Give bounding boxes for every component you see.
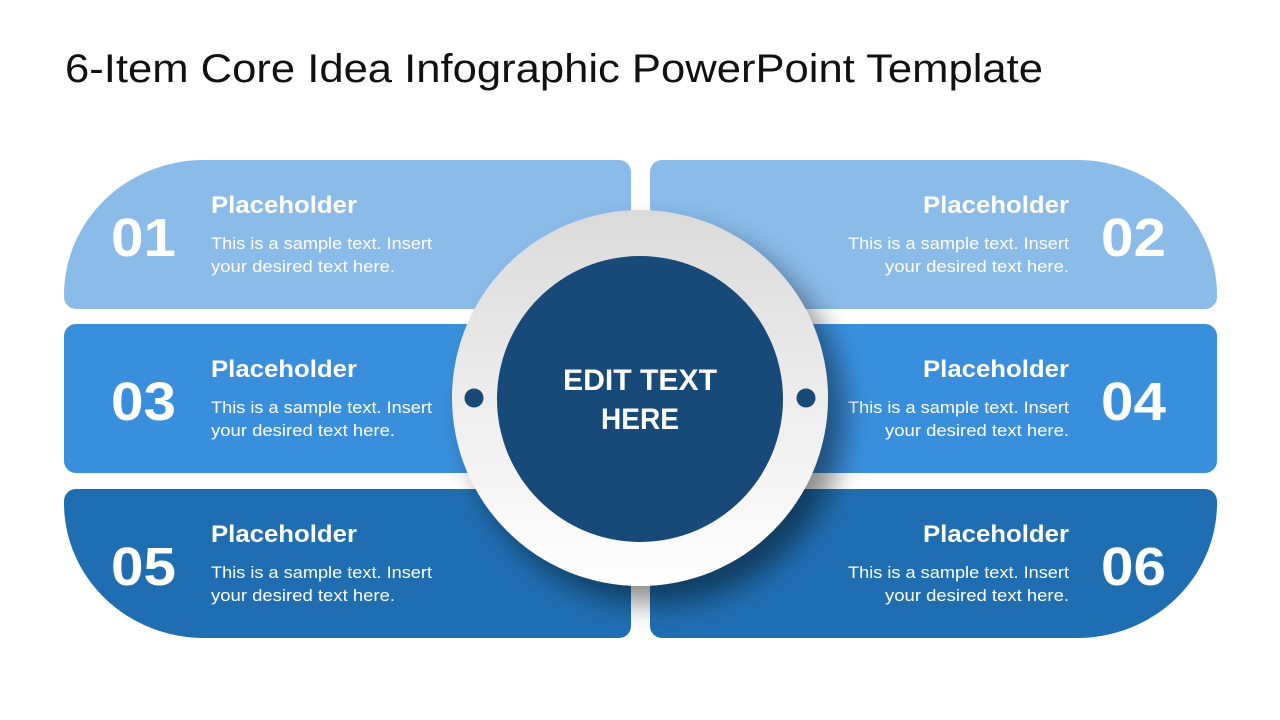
panel: 06: 06	[1101, 537, 1166, 597]
title: 6-Item Core Idea Infographic PowerPoint Template	[65, 47, 1043, 91]
panel: 06: This is a sample text. Insert	[848, 563, 1069, 582]
panel: 02	[650, 160, 1217, 309]
panel: 04	[650, 324, 1217, 473]
panel: 03	[64, 324, 631, 473]
panel: 06: your desired text here.	[885, 586, 1069, 605]
panel: 02: Placeholder	[923, 192, 1069, 219]
panel: 01: Placeholder	[211, 192, 357, 219]
icon: left dot	[464, 388, 484, 408]
panel: 02: This is a sample text. Insert	[848, 234, 1069, 253]
icon: right dot	[796, 388, 816, 408]
panel: 05: your desired text here.	[211, 586, 395, 605]
panel: 06	[650, 489, 1217, 638]
panel: 04: 04	[1101, 372, 1166, 432]
center circle: EDIT TEXT	[563, 364, 717, 397]
panel: 03: 03	[111, 372, 176, 432]
center circle	[452, 210, 828, 586]
panel: 04: your desired text here.	[885, 421, 1069, 440]
panel: 01: 01	[111, 208, 176, 268]
center circle: HERE	[601, 403, 679, 436]
panel: 05: 05	[111, 537, 176, 597]
panel: 01	[64, 160, 631, 309]
panel: 06: Placeholder	[923, 521, 1069, 548]
panel: 05: This is a sample text. Insert	[211, 563, 432, 582]
panel: 04: This is a sample text. Insert	[848, 398, 1069, 417]
panel: 03: your desired text here.	[211, 421, 395, 440]
panel: 01: This is a sample text. Insert	[211, 234, 432, 253]
panel: 03: Placeholder	[211, 356, 357, 383]
panel: 02: 02	[1101, 208, 1166, 268]
panel: 03: This is a sample text. Insert	[211, 398, 432, 417]
panel: 04: Placeholder	[923, 356, 1069, 383]
panel: 05: Placeholder	[211, 521, 357, 548]
panel: 02: your desired text here.	[885, 257, 1069, 276]
panel: 01: your desired text here.	[211, 257, 395, 276]
panel: 05	[64, 489, 631, 638]
